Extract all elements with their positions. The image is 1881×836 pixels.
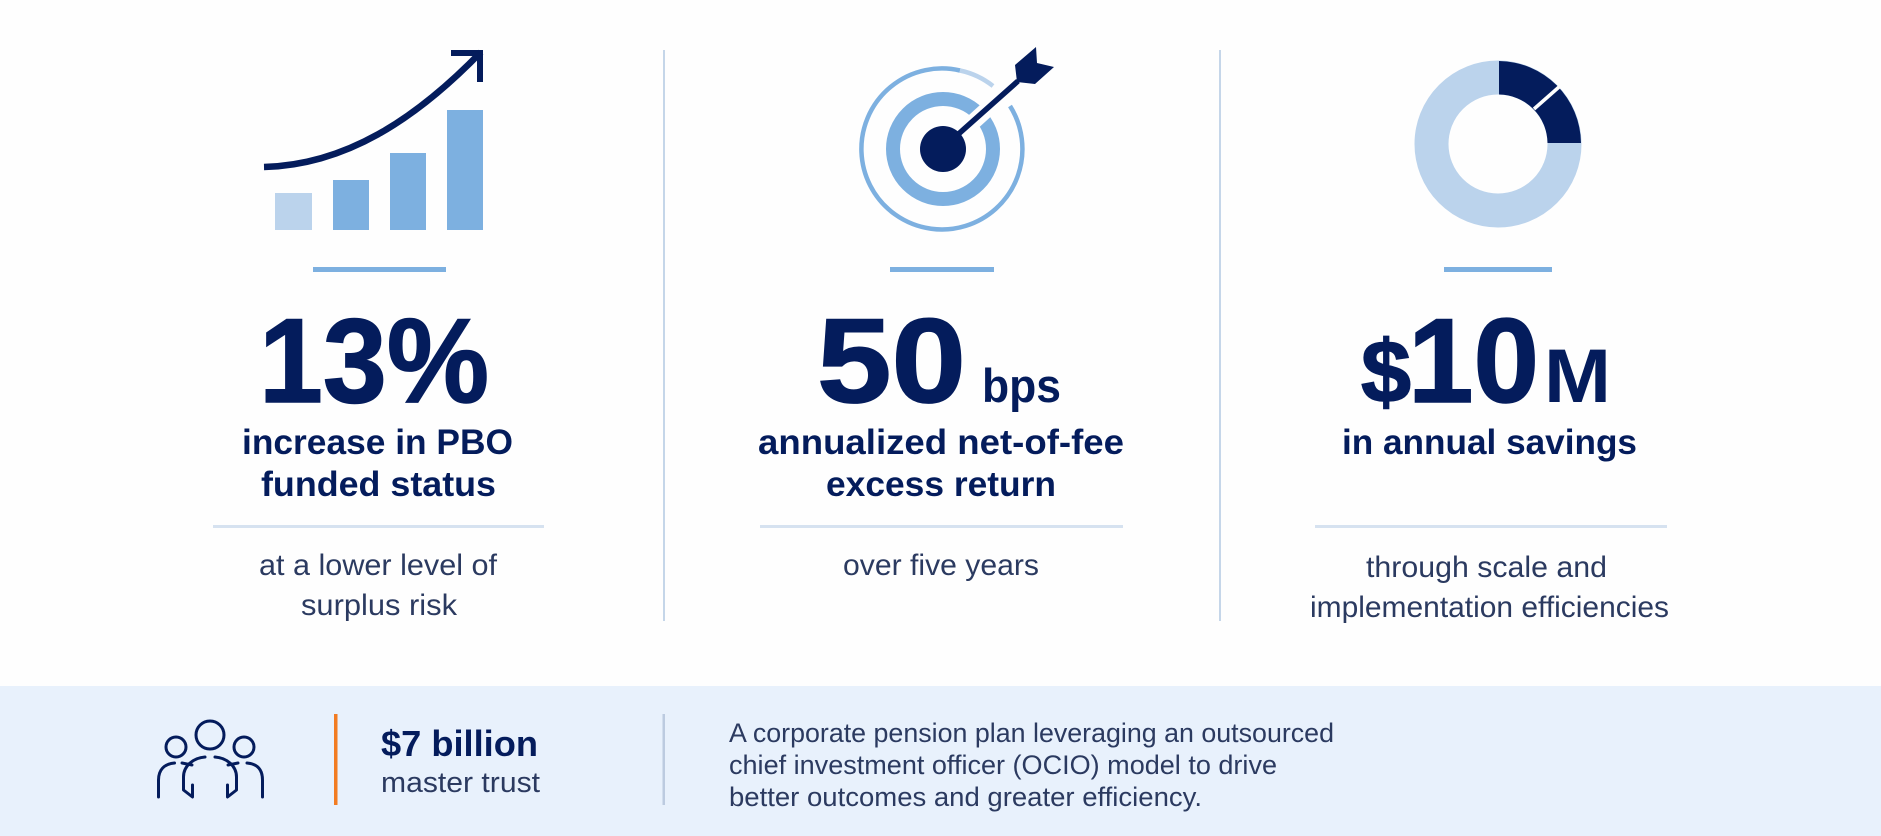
stat: $10M: M bbox=[1544, 334, 1611, 419]
heading: in annual savings: in annual savings bbox=[1342, 423, 1637, 462]
heading: increase in PBO funded status: funded status bbox=[261, 465, 496, 504]
stat: 50 bps: 50 bbox=[817, 294, 966, 428]
icon: group of three people bbox=[158, 721, 262, 797]
icon: target with arrow bbox=[861, 47, 1054, 229]
stat: 50 bps bbox=[817, 294, 1061, 428]
text: plan description: better outcomes and greater efficiency. bbox=[729, 782, 1202, 812]
stat: $7 billion master trust: $7 billion bbox=[381, 723, 538, 764]
text: through scale and implementation efficiencies bbox=[1310, 551, 1669, 624]
heading: annualized net-of-fee excess return: annualized net-of-fee bbox=[758, 423, 1124, 462]
text: at a lower level of surplus risk: surplus risk bbox=[301, 589, 458, 622]
stat: $7 billion master trust bbox=[381, 723, 540, 799]
panel: 13% funded status bbox=[213, 52, 544, 622]
panel: bottom summary band bbox=[0, 686, 1881, 836]
text: plan description: chief investment officer (OCIO) model to drive bbox=[729, 750, 1277, 780]
text: through scale and implementation efficiencies: through scale and bbox=[1366, 551, 1607, 584]
text: through scale and implementation efficiencies: implementation efficiencies bbox=[1310, 591, 1669, 624]
panel: 50 bps excess return bbox=[758, 47, 1124, 582]
stat: $10M: $ bbox=[1361, 322, 1411, 421]
heading: annualized net-of-fee excess return: excess return bbox=[826, 465, 1056, 504]
stat: 50 bps: bps bbox=[982, 359, 1061, 412]
heading: annualized net-of-fee excess return bbox=[758, 423, 1124, 504]
icon: rising bar chart with arrow bbox=[264, 52, 483, 230]
text: at a lower level of surplus risk: at a lower level of bbox=[259, 549, 498, 582]
stat: $7 billion master trust: master trust bbox=[381, 767, 540, 799]
heading: increase in PBO funded status bbox=[242, 423, 513, 504]
text: over five years: over five years bbox=[843, 549, 1039, 582]
stat: $10M bbox=[1361, 294, 1611, 428]
text: at a lower level of surplus risk bbox=[259, 549, 498, 622]
heading: increase in PBO funded status: increase in PBO bbox=[242, 423, 513, 462]
panel: $10M annual savings bbox=[1310, 61, 1669, 624]
stat: 13%: 13% bbox=[259, 294, 489, 428]
text: plan description bbox=[729, 718, 1334, 812]
icon: donut chart bbox=[1432, 61, 1581, 210]
stat: $10M: 10 bbox=[1408, 294, 1539, 428]
text: plan description: A corporate pension plan leveraging an outsourced bbox=[729, 718, 1334, 748]
